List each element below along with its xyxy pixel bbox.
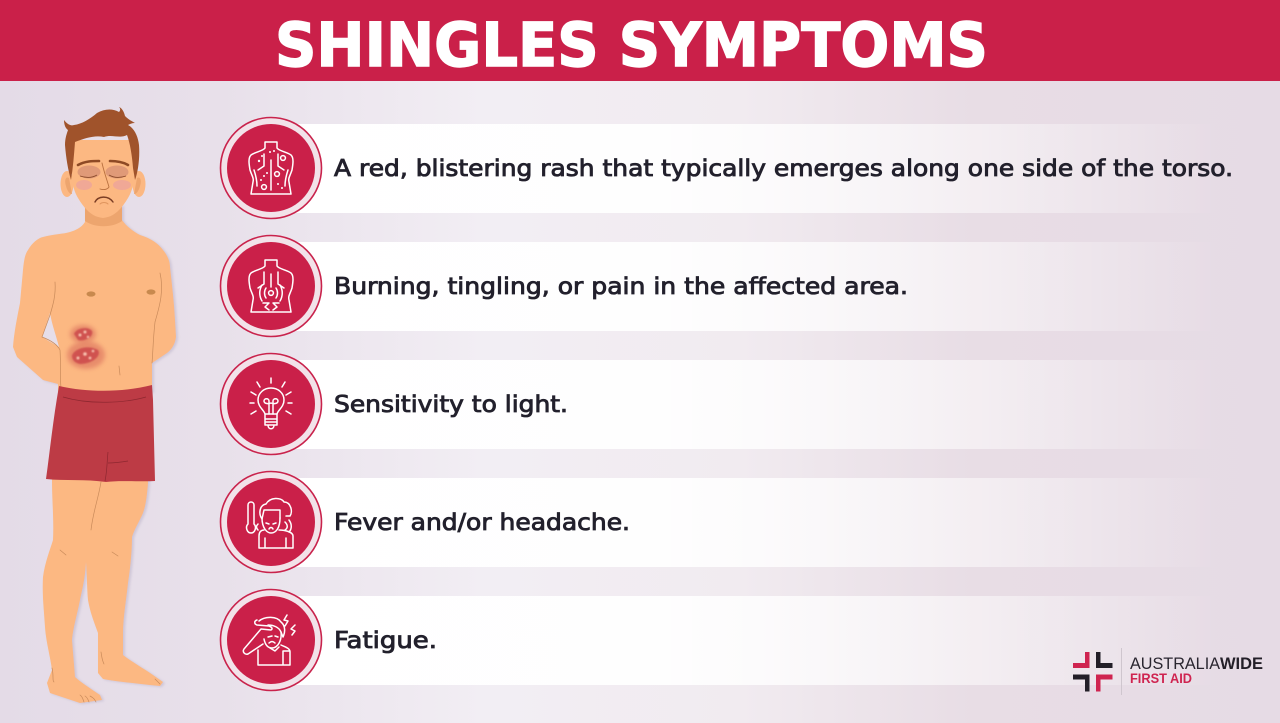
logo: Australia Wide First Aid: [1073, 648, 1263, 695]
face details: [78, 166, 100, 178]
gap between arm and torso: [42, 313, 59, 347]
text: A red, blistering rash that typically emerges along one side of the torso.: [334, 156, 1233, 182]
row 2: burning symptom: [220, 236, 1220, 336]
header banner: [0, 0, 1280, 81]
icon: back with blisters: [220, 118, 322, 218]
row 5: fatigue symptom: [220, 590, 1220, 690]
head: [60, 107, 146, 226]
nipples: [86, 289, 156, 297]
text: Fatigue.: [334, 628, 437, 654]
logo wordmark: FIRST AID: [1130, 670, 1192, 686]
row 1: rash symptom: [220, 118, 1233, 218]
icon: light bulb: [220, 354, 322, 454]
logo wordmark: [1130, 655, 1263, 686]
icon: back with pain waves: [220, 236, 322, 336]
logo wordmark: WIDE: [1220, 655, 1263, 673]
body crease lines: [42, 273, 162, 702]
shorts: [46, 385, 155, 482]
text: Burning, tingling, or pain in the affected area.: [334, 274, 908, 300]
text: Sensitivity to light.: [334, 392, 568, 418]
logo wordmark: AUSTRALIA: [1130, 655, 1220, 673]
row 4: fever symptom: [220, 472, 1220, 572]
rash: [67, 325, 105, 369]
icon: person with fever and thermometer: [220, 472, 322, 572]
text: Fever and/or headache.: [334, 510, 630, 536]
row 3: light sensitivity symptom: [220, 354, 1220, 454]
illustration: man with shingles rash: [13, 107, 176, 703]
body: [13, 205, 176, 703]
logo mark: cross: [1073, 652, 1112, 692]
icon: tired person holding head: [220, 590, 322, 690]
title: SHINGLES SYMPTOMS: [275, 10, 988, 81]
